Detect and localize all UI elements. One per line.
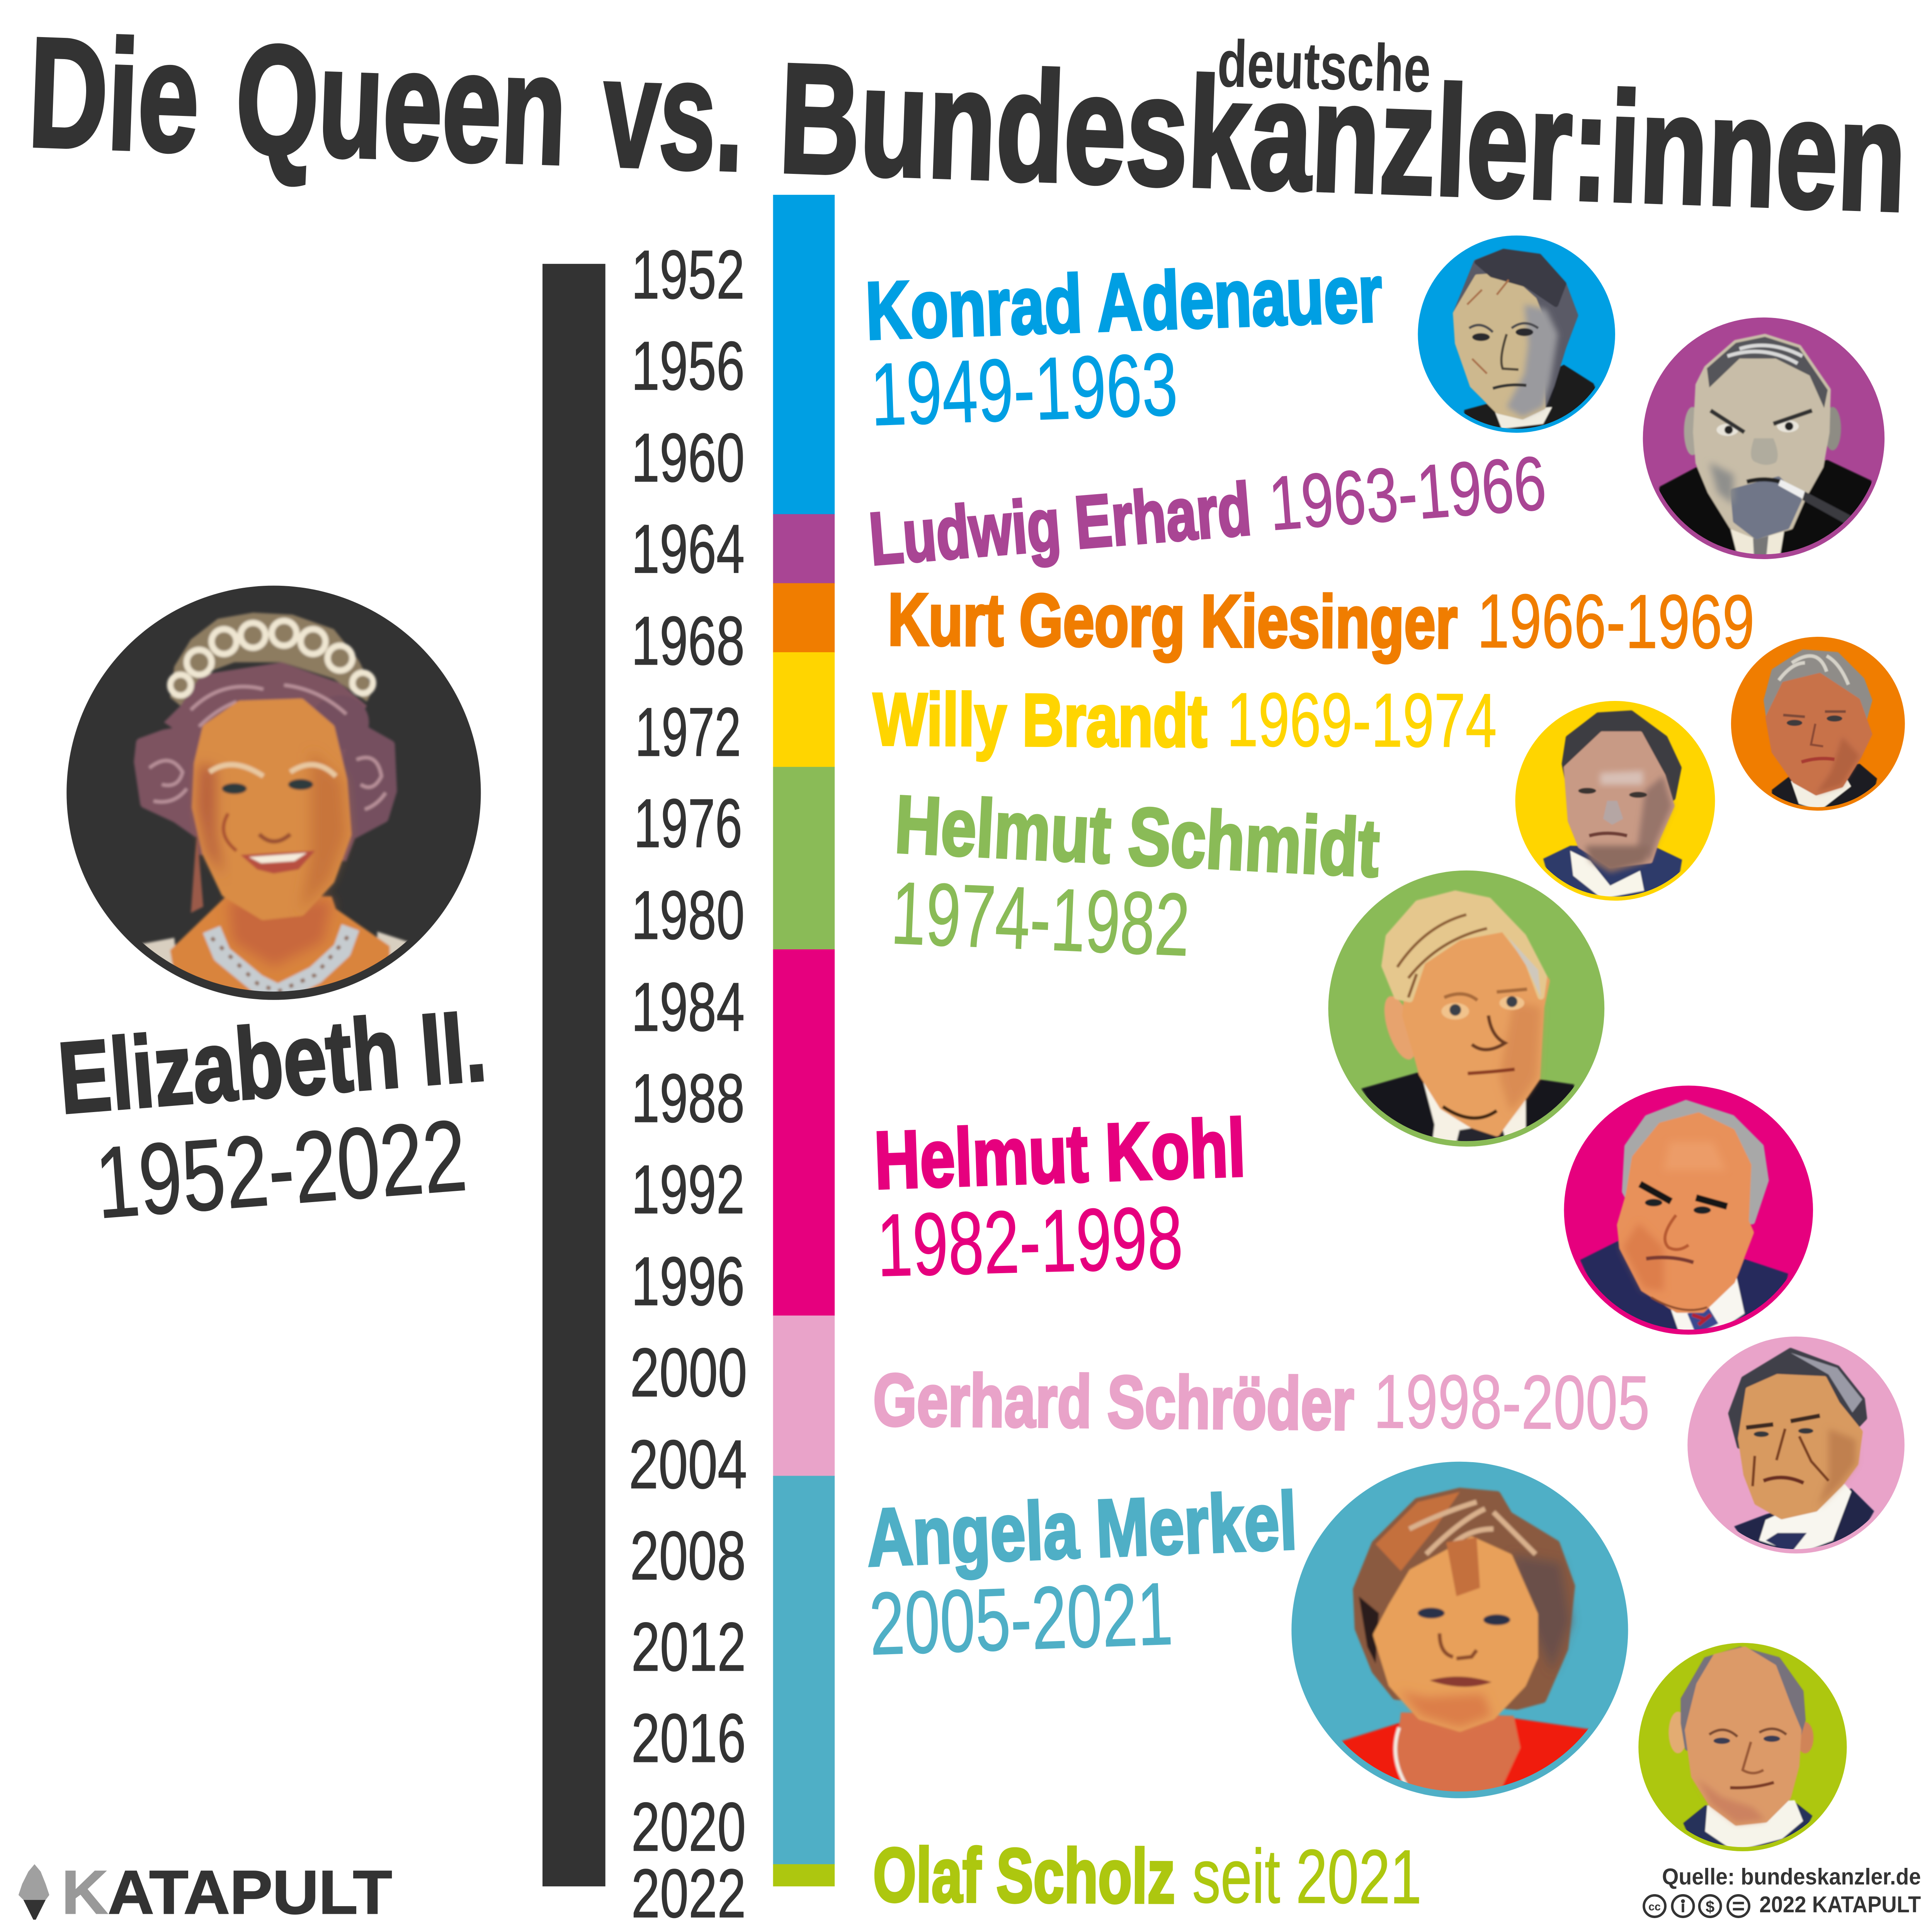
year axis labels: 1964 xyxy=(631,510,745,587)
year axis labels: 2020 xyxy=(631,1788,746,1865)
licence icons: cc xyxy=(1648,1901,1661,1913)
title: Queen xyxy=(233,12,570,197)
label: Konrad Adenauer: 1949-1963 xyxy=(869,334,1179,444)
label: Helmut Kohl xyxy=(873,1102,1247,1295)
label: Willy Brandt xyxy=(873,677,1497,763)
licence icons xyxy=(1644,1895,1749,1917)
queen reign years: 1952-2022 xyxy=(92,1099,470,1240)
label: Willy Brandt: Willy Brandt xyxy=(873,678,1208,762)
label: Olaf Scholz: seit 2021 xyxy=(1192,1833,1422,1919)
label: Helmut Kohl: 1982-1998 xyxy=(876,1188,1184,1295)
year axis labels: 1980 xyxy=(631,876,745,954)
label: Konrad Adenauer xyxy=(864,247,1384,444)
year axis labels: 2012 xyxy=(631,1608,746,1685)
year axis labels: 1968 xyxy=(631,602,745,679)
year axis labels: 1976 xyxy=(634,784,742,862)
year axis labels: 2000 xyxy=(630,1334,747,1411)
year axis labels: 1992 xyxy=(631,1151,745,1228)
title: vs. xyxy=(600,25,747,203)
icon: logo mark xyxy=(19,1864,49,1920)
year axis labels: 2022 xyxy=(631,1855,746,1932)
copyright: 2022 KATAPULT xyxy=(1759,1892,1921,1917)
portrait: Willy Brandt xyxy=(1515,701,1715,901)
year axis labels: 1996 xyxy=(631,1242,745,1320)
title xyxy=(26,5,1909,244)
portrait: Kurt Georg Kiesinger xyxy=(1731,637,1905,811)
year axis labels: 2016 xyxy=(631,1699,746,1777)
year axis labels: 2004 xyxy=(629,1425,747,1503)
year axis labels: 1984 xyxy=(631,968,745,1046)
timeline bar: chancellors xyxy=(773,195,835,1886)
year axis labels: 1972 xyxy=(635,693,741,770)
portrait: Angela Merkel xyxy=(1291,1462,1628,1798)
label: Ludwig Erhard xyxy=(866,440,1549,580)
title qualifier: deutsche: deutsche xyxy=(1216,26,1432,106)
portrait: Konrad Adenauer xyxy=(1418,235,1615,433)
label: Gerhard Schroeder: 1998-2005 xyxy=(1373,1359,1650,1446)
title: Die xyxy=(26,5,202,185)
queen name: Elizabeth II. xyxy=(54,989,490,1135)
year axis labels: 1988 xyxy=(631,1060,745,1137)
source credit: Quelle: bundeskanzler.de xyxy=(1662,1864,1921,1889)
year axis labels: 2008 xyxy=(630,1517,746,1594)
label: Helmut Kohl: Helmut Kohl xyxy=(873,1102,1247,1206)
portrait: Gerhard Schroeder xyxy=(1687,1337,1905,1553)
label: Angela Merkel: 2005-2021 xyxy=(867,1564,1174,1673)
portrait: Helmut Kohl xyxy=(1564,1086,1813,1335)
label: Helmut Schmidt: 1974-1982 xyxy=(889,863,1192,975)
year axis labels xyxy=(629,236,747,1932)
label: Angela Merkel: Angela Merkel xyxy=(865,1475,1299,1583)
licence icons: $ xyxy=(1706,1898,1714,1916)
timeline bar: Queen xyxy=(543,264,605,1886)
label: Ludwig Erhard: Ludwig Erhard xyxy=(866,468,1254,580)
label: Kurt Georg Kiesinger: 1966-1969 xyxy=(1477,578,1755,665)
label: Willy Brandt: 1969-1974 xyxy=(1227,677,1497,763)
label: Angela Merkel xyxy=(865,1475,1299,1673)
label: Gerhard Schroeder: Gerhard Schröder xyxy=(873,1359,1354,1445)
portrait: Olaf Scholz xyxy=(1638,1643,1847,1851)
portrait: Helmut Schmidt xyxy=(1328,871,1604,1146)
label: Kurt Georg Kiesinger: Kurt Georg Kiesinger xyxy=(888,578,1458,664)
year axis labels: 1960 xyxy=(631,419,745,496)
label: Olaf Scholz: Olaf Scholz xyxy=(873,1832,1175,1919)
year axis labels: 1952 xyxy=(631,236,745,313)
label: Ludwig Erhard: 1963-1966 xyxy=(1266,440,1549,546)
label: Konrad Adenauer: Konrad Adenauer xyxy=(864,247,1384,356)
logo: KATAPULT: KATAPULT xyxy=(62,1858,392,1927)
label: Helmut Schmidt: Helmut Schmidt xyxy=(893,778,1381,894)
portrait: Ludwig Erhard xyxy=(1643,318,1884,559)
portrait: Elizabeth II xyxy=(66,586,481,1000)
year axis labels: 1956 xyxy=(631,327,745,404)
label: Helmut Schmidt xyxy=(889,778,1381,975)
